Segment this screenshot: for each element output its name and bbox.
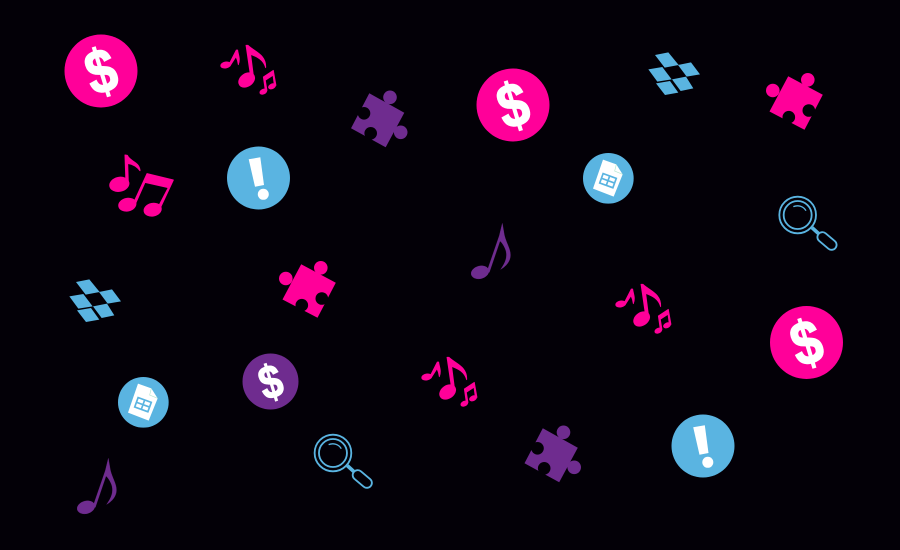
icon: dollar coin top left: $ (77, 35, 125, 109)
icon: document circle lower (118, 377, 169, 428)
icon: purple dollar coin: $ (253, 355, 289, 411)
icon: purple music note lower (76, 458, 116, 516)
icon: blue diamonds left (69, 279, 121, 322)
icon: pink puzzle piece upper (766, 73, 823, 130)
icon: three music notes centre (421, 357, 477, 407)
icon: alert circle upper (227, 146, 290, 210)
icon: blue diamonds top (648, 52, 700, 95)
icon: alert circle lower (672, 414, 734, 478)
icon: purple puzzle piece upper (351, 90, 408, 147)
icon: purple puzzle piece lower (524, 426, 581, 482)
icon: pink puzzle piece lower (279, 261, 336, 318)
icon: document circle upper (583, 153, 634, 204)
icon: magnifier lower (315, 435, 374, 490)
icon: double music notes (108, 155, 173, 218)
icon: three music notes top (220, 45, 276, 95)
icon: three music notes right (615, 284, 671, 334)
icon: dollar coin top centre: $ (489, 69, 537, 143)
icon: dollar coin right: $ (783, 306, 831, 381)
icon: dollar coin top centre (476, 68, 550, 143)
icon: magnifier right (779, 197, 839, 252)
icon: dollar coin top left (64, 34, 138, 109)
icon: purple music note centre (470, 223, 510, 281)
icon: dollar coin right (770, 306, 843, 381)
icon: purple dollar coin (242, 354, 298, 411)
